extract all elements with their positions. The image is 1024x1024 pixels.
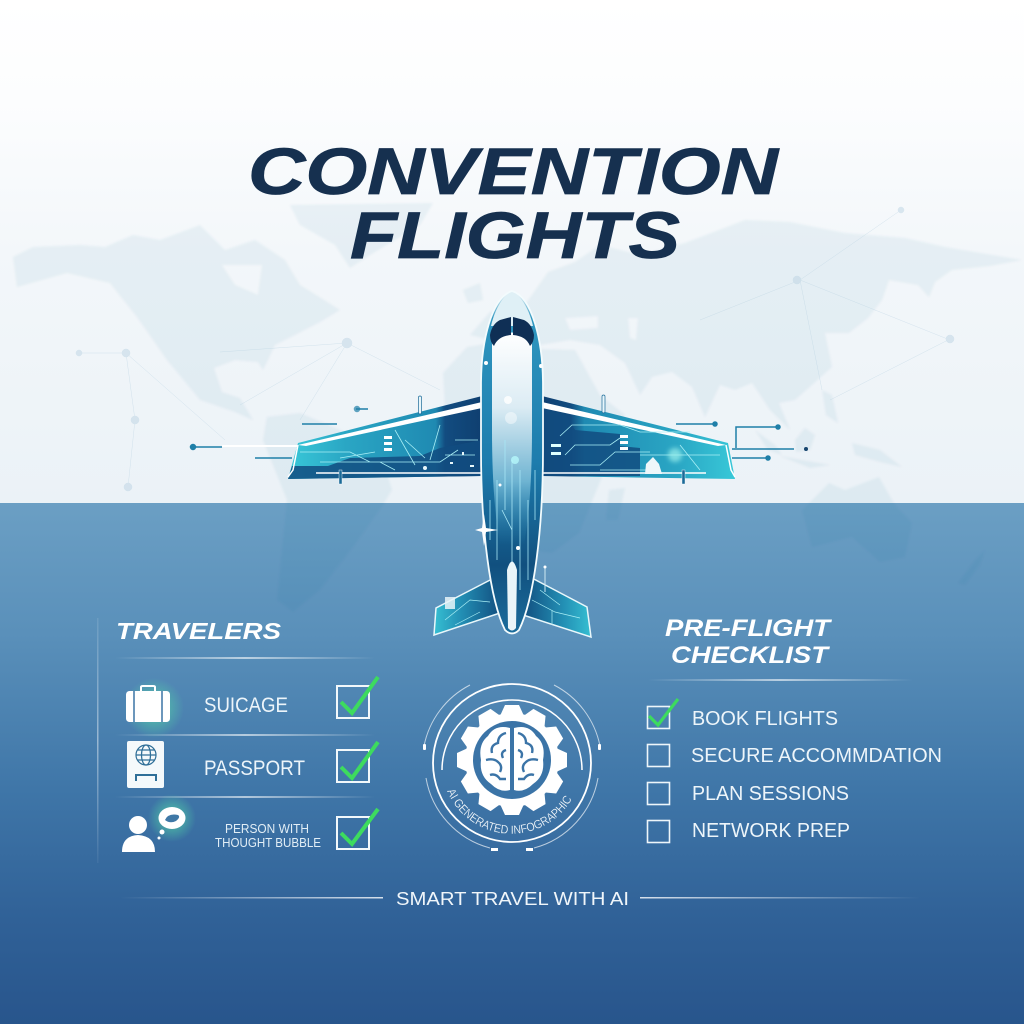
title: CONVENTION [248, 134, 780, 208]
checkbox: person [337, 809, 378, 849]
background: sky [0, 0, 1024, 503]
curved text: AI generated infographic: AI GENERATED INFOGRAPHIC [446, 790, 571, 834]
heading: pre-flight checklist [665, 615, 833, 669]
callout lines around airplane [190, 406, 808, 460]
left wing [288, 396, 482, 484]
background: lower blue panel [0, 503, 1024, 1024]
heading: travelers: TRAVELERS [116, 618, 282, 644]
title [248, 134, 780, 272]
emblem: AI gear and brain [423, 683, 601, 851]
panel: travelers [115, 618, 378, 852]
panel: pre-flight checklist [648, 615, 942, 842]
item: secure accommodation: SECURE ACCOMMDATION [691, 745, 942, 767]
icon: brain [480, 727, 544, 791]
left tailplane [434, 578, 500, 635]
checkbox: passport [337, 742, 378, 782]
label: passport: PASSPORT [204, 757, 305, 780]
divider: left panel frame [97, 618, 98, 863]
checkbox: suitcase [337, 677, 378, 718]
world map [13, 203, 1022, 612]
sparkle [475, 514, 498, 546]
title: FLIGHTS [350, 198, 680, 272]
icon: passport [127, 741, 164, 788]
map network nodes and links [76, 207, 954, 491]
label: suitcase: SUICAGE [204, 694, 288, 717]
item: book flights: BOOK FLIGHTS [692, 708, 838, 730]
fuselage [481, 291, 543, 634]
airplane [288, 291, 735, 637]
right tailplane [523, 566, 591, 637]
item: network prep: NETWORK PREP [692, 820, 850, 842]
label: person with thought bubble: PERSON WITH [225, 821, 309, 836]
footer tagline: SMART TRAVEL WITH AI [396, 889, 629, 909]
label: person with thought bubble: THOUGHT BUBBLE [215, 835, 321, 850]
heading: pre-flight checklist: CHECKLIST [671, 642, 831, 669]
icon: person with thought bubble [122, 794, 196, 852]
label: person with thought bubble [215, 821, 321, 850]
item: plan sessions: PLAN SESSIONS [692, 783, 849, 805]
heading: pre-flight checklist: PRE-FLIGHT [665, 615, 833, 642]
icon: gear [457, 705, 567, 815]
item: book flights [648, 699, 838, 730]
icon: suitcase [124, 678, 184, 738]
right wing [542, 395, 735, 484]
